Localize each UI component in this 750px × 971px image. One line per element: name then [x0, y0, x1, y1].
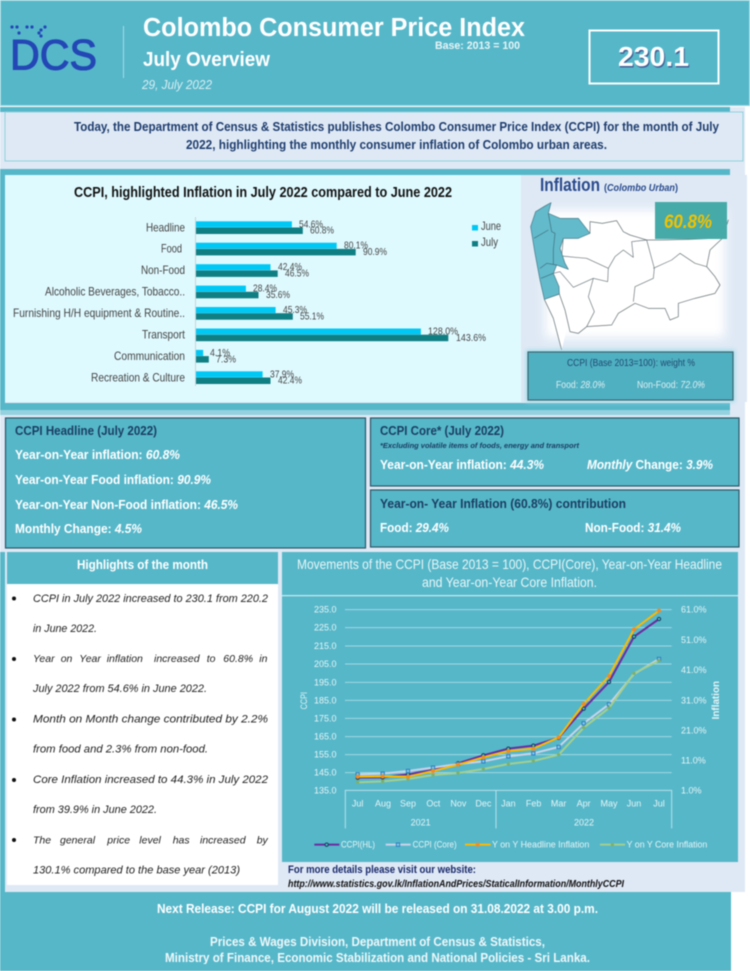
month and year labels: 2022 [574, 818, 594, 828]
subtitle: July Overview [143, 49, 270, 71]
panel: CCPI core [370, 418, 739, 486]
row: Communication: Communication [114, 349, 185, 363]
inflation value callout: 60.8% [664, 212, 712, 233]
panel: CCPI headline: Year-on-Year Food inflation: 90.9% [15, 472, 211, 487]
CCPI weight box [526, 350, 735, 402]
intro text panel [5, 112, 743, 161]
row: Headline: 54.6% [299, 218, 323, 230]
highlight 2: on [61, 653, 73, 665]
map of Colombo urban districts [531, 203, 728, 350]
month and year labels: 2021 [411, 818, 431, 828]
panel: highlights of the month [7, 552, 278, 885]
highlight 2: July 2022 from 54.6% in June 2022. [32, 683, 207, 695]
row: Non-Food: Non-Food [141, 263, 185, 277]
row: Headline: 60.8% [310, 225, 334, 237]
highlight 2: inflation [107, 653, 143, 665]
row: Alcoholic Beverages: 28.4% [253, 283, 277, 295]
row: Furnishing: 45.3% [283, 304, 307, 316]
month and year labels [352, 799, 665, 828]
row: Alcoholic Beverages [45, 283, 290, 301]
row: Headline: Headline [146, 220, 185, 234]
highlight 2: Year [33, 653, 55, 665]
highlight 1 [12, 593, 268, 635]
line chart legend [314, 840, 707, 850]
row: Transport [142, 326, 486, 344]
line chart legend: Y on Y Headline Inflation [492, 840, 589, 850]
footer: Next Release: CCPI for August 2022 will be released on 31.08.2022 at 3.00 p.m. [157, 901, 598, 916]
left axis labels: 155.0 [314, 750, 336, 760]
line chart legend: Y on Y Core Inflation [627, 840, 707, 850]
date: 29, July 2022 [141, 78, 212, 92]
highlight 4: from 39.9% in June 2022. [33, 804, 157, 816]
line chart heading [297, 556, 722, 590]
panel: inflation contribution: Food: 29.4% [380, 520, 449, 535]
chart title: CCPI, highlighted Inflation in July 2022 compared to June 2022 [74, 184, 452, 201]
highlight 5: by [257, 834, 269, 846]
panel: CCPI core: CCPI Core* (July 2022) [380, 423, 504, 438]
title: Colombo Consumer Price Index [143, 14, 525, 42]
month and year labels: Apr [577, 799, 591, 809]
highlights heading [7, 552, 278, 584]
right axis labels: 41.0% [681, 665, 706, 675]
row: Food: 90.9% [363, 246, 387, 258]
highlight 4 [12, 774, 268, 816]
highlight 2: 60.8% [223, 653, 253, 665]
panel: CCPI core: *Excluding volatile items of foods, energy and transport [380, 441, 579, 450]
left axis labels: 165.0 [314, 732, 336, 742]
highlight 3: Month on Month change contributed by 2.2% [33, 714, 268, 726]
row: Communication: 4.1% [210, 347, 230, 359]
left axis labels: 215.0 [314, 641, 336, 651]
highlight 2: increased [154, 653, 201, 665]
panel: inflation map [521, 175, 747, 402]
legend: June [481, 219, 501, 233]
intro text panel: 2022, highlighting the monthly consumer inflation of Colombo urban areas. [186, 137, 607, 152]
left axis labels: 175.0 [314, 713, 336, 723]
line chart heading: and Year-on-Year Core Inflation. [422, 574, 597, 590]
highlight 4: Core Inflation increased to 44.3% in July 2022 [33, 774, 268, 786]
left axis labels: 185.0 [314, 695, 336, 705]
month and year labels: Dec [475, 799, 492, 809]
map heading: Inflation [540, 175, 600, 195]
headline index value box [590, 30, 718, 84]
row: Headline [146, 218, 334, 237]
highlight 2 [12, 653, 268, 695]
panel: CCPI headline: Year-on-Year Non-Food inflation: 46.5% [15, 497, 238, 512]
row: Communication [114, 347, 236, 365]
month and year labels: May [601, 799, 618, 809]
month and year labels: Oct [426, 799, 441, 809]
left axis labels: 235.0 [314, 605, 336, 615]
website note: http://www.statistics.gov.lk/InflationAndPrices/StaticalInformation/MonthlyCCPI [288, 879, 624, 890]
row: Recreation: 42.4% [278, 375, 302, 387]
legend: July [481, 235, 498, 249]
CCPI weight box: Non-Food: 72.0% [637, 380, 705, 391]
highlight 1: in June 2022. [33, 623, 97, 635]
row: Furnishing: Furnishing H/H equipment & Routine.. [13, 306, 185, 320]
panel: CCPI movements line chart [282, 552, 738, 862]
panel: inflation contribution [370, 490, 739, 547]
highlight 2: in [259, 653, 268, 665]
right axis labels: 21.0% [681, 725, 706, 735]
row: Non-Food [141, 261, 309, 280]
panel: CCPI headline [6, 418, 366, 548]
legend [472, 219, 501, 249]
left axis labels: 205.0 [314, 659, 336, 669]
highlight 5: The [33, 834, 51, 846]
month and year labels: Jul [352, 799, 363, 809]
highlight 5: 130.1% compared to the base year (2013) [33, 864, 240, 876]
panel: inflation contribution: Year-on- Year Inflation (60.8%) contribution [380, 496, 626, 511]
line chart [299, 605, 722, 850]
row: Transport: 128.0% [428, 326, 458, 338]
row: Transport: 143.6% [456, 332, 486, 344]
footer: Ministry of Finance, Economic Stabilization and National Policies - Sri Lanka. [165, 950, 590, 965]
left axis labels [299, 605, 336, 796]
series: year on year headline inflation [356, 609, 661, 779]
line chart legend: CCPI(HL) [341, 840, 375, 850]
left axis labels: 145.0 [314, 768, 336, 778]
row: Food: 80.1% [344, 240, 368, 252]
CCPI weight box: CCPI (Base 2013=100): weight % [567, 358, 695, 369]
right axis labels: 51.0% [681, 635, 706, 645]
panel: CCPI headline: CCPI Headline (July 2022) [15, 423, 157, 438]
right axis labels: 31.0% [681, 695, 706, 705]
row: Recreation: Recreation & Culture [91, 370, 185, 384]
panel: CCPI headline: Year-on-Year inflation: 60.8% [15, 447, 180, 462]
month and year labels: Aug [375, 799, 391, 809]
highlight 5: increased [200, 834, 247, 846]
footer [0, 892, 731, 971]
highlight 5: general [60, 834, 96, 846]
highlight 3: from food and 2.3% from non-food. [33, 744, 208, 756]
month and year labels: Jan [501, 799, 516, 809]
website note [288, 864, 624, 890]
right axis labels: Inflation [711, 681, 722, 719]
row: Recreation [91, 368, 302, 387]
right axis labels: 1.0% [681, 786, 701, 796]
base note: Base: 2013 = 100 [435, 40, 520, 52]
month and year labels: Sep [400, 799, 416, 809]
series: CCPI headline [356, 617, 661, 779]
row: Alcoholic Beverages: 35.6% [266, 289, 290, 301]
month and year labels: Mar [551, 799, 566, 809]
month and year labels: Nov [450, 799, 467, 809]
right axis labels: 61.0% [681, 605, 706, 615]
highlight 5: has [173, 834, 190, 846]
highlight 2: to [207, 653, 216, 665]
row: Furnishing: 55.1% [300, 310, 324, 322]
highlight 5: price [106, 834, 130, 846]
row: Non-Food: 42.4% [278, 261, 302, 273]
logo: DCS: DCS [10, 32, 97, 80]
highlight 1: CCPI in July 2022 increased to 230.1 from 220.2 [33, 593, 268, 605]
highlight 5: level [139, 834, 162, 846]
series: year on year core inflation [356, 659, 661, 784]
month and year labels: Jul [653, 799, 665, 809]
month and year labels: Feb [526, 799, 541, 809]
headline index value box: 230.1 [618, 41, 689, 72]
month and year labels: Jun [627, 799, 641, 809]
website note: For more details please visit our website: [288, 864, 476, 876]
left axis labels: 195.0 [314, 677, 336, 687]
left axis labels: CCPI [299, 692, 309, 709]
line chart legend: CCPI (Core) [413, 840, 457, 850]
right axis labels [681, 605, 722, 796]
map subheading: (Colombo Urban) [604, 182, 678, 194]
row: Recreation: 37.9% [270, 368, 294, 380]
footer: Prices & Wages Division, Department of Census & Statistics, [210, 934, 545, 949]
headline index value box: 230.1 [619, 42, 690, 74]
row: Communication: 7.3% [216, 353, 236, 365]
inflation value callout [655, 202, 727, 239]
row: Transport: Transport [142, 328, 186, 342]
highlights heading: Highlights of the month [77, 557, 208, 572]
row: Furnishing [13, 304, 324, 322]
panel: inflation bar chart [5, 175, 521, 402]
row: Food [161, 240, 387, 258]
row: Food: Food [161, 242, 182, 256]
row: Alcoholic Beverages: Alcoholic Beverages, Tobacco.. [45, 285, 185, 299]
panel: inflation contribution: Non-Food: 31.4% [585, 520, 681, 535]
CCPI weight box: Food: 28.0% [556, 380, 605, 391]
panel: CCPI core: Year-on-Year inflation: 44.3% [380, 457, 544, 472]
panel: CCPI headline: Monthly Change: 4.5% [15, 521, 142, 536]
left axis labels: 225.0 [314, 623, 336, 633]
highlight 3 [12, 714, 268, 756]
highlight 5 [12, 834, 269, 876]
header banner [0, 0, 750, 106]
right axis labels: 11.0% [681, 755, 706, 765]
row: Non-Food: 46.5% [285, 268, 309, 280]
left axis labels: 135.0 [314, 786, 336, 796]
panel: CCPI core: Monthly Change: 3.9% [587, 457, 713, 472]
highlight 2: Year [79, 653, 101, 665]
series: CCPI core [356, 657, 661, 776]
